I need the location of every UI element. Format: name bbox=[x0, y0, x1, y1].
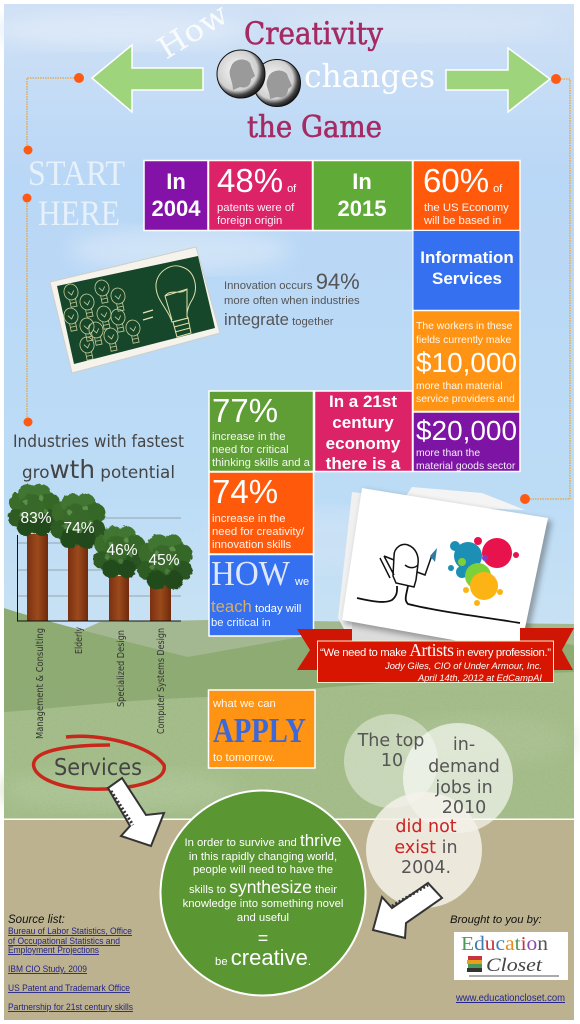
panel: 21st century economy: In a 21st bbox=[329, 392, 397, 411]
chart: tree bars: Specialized Design bbox=[116, 630, 127, 707]
source list: of Occupational Statistics and bbox=[8, 936, 120, 946]
arrow: right bbox=[446, 48, 550, 112]
panel: information services bbox=[413, 230, 520, 310]
logo: education closet bbox=[454, 932, 568, 980]
panel: 48 percent bbox=[208, 160, 312, 230]
panel: 74 percent: 74% bbox=[212, 473, 278, 510]
panel: 77 percent: increase in the bbox=[212, 431, 285, 443]
title: the Game bbox=[247, 110, 382, 145]
logo: education closet: Closet bbox=[486, 955, 543, 976]
panel: creative circle: skills to synthesize their bbox=[189, 877, 337, 897]
panel: 10000 dollars: service providers and bbox=[416, 394, 515, 405]
panel: creative circle: In order to survive and thrive bbox=[184, 831, 342, 850]
source list: US Patent and Trademark Office bbox=[8, 983, 130, 993]
chart: tree bars: Computer Systems Design bbox=[156, 628, 167, 734]
text: innovation statistic bbox=[224, 269, 360, 329]
arrow: bubbles to circle bbox=[373, 883, 442, 938]
chart: tree bars: 83% bbox=[20, 510, 52, 527]
panel: how we teach: we bbox=[294, 576, 309, 588]
panel: 74 percent: increase in the bbox=[212, 513, 285, 525]
panel: in 2004: In bbox=[166, 169, 186, 194]
bubbles: top 10 jobs: exist in bbox=[394, 838, 458, 858]
panel: how we teach: be critical in bbox=[211, 617, 271, 629]
panel: 77 percent: thinking skills and a bbox=[212, 457, 311, 469]
panel: creative circle: be creative. bbox=[215, 945, 311, 970]
heading: fastest growth: Industries with fastest bbox=[13, 432, 184, 452]
heading: start here: START bbox=[28, 153, 125, 193]
heading: start here: HERE bbox=[38, 193, 120, 233]
source list: Source list: bbox=[8, 914, 65, 926]
banner: artists quote bbox=[297, 628, 574, 683]
bubbles: top 10 jobs: did not bbox=[395, 817, 457, 837]
callout: services circled bbox=[34, 736, 164, 789]
panel: 20000 dollars: $20,000 bbox=[416, 415, 517, 446]
bubbles: top 10 jobs bbox=[344, 714, 513, 908]
panel: how we teach: teach today will bbox=[211, 597, 301, 616]
panel: 20000 dollars: more than the bbox=[416, 448, 480, 459]
dotted connector left top bbox=[22, 73, 84, 426]
link: website: www.educationcloset.com bbox=[455, 993, 565, 1004]
panel: in 2015: 2015 bbox=[338, 196, 386, 221]
panel: creative circle: people will need to have the bbox=[193, 864, 333, 876]
text: innovation statistic: Innovation occurs 94% bbox=[224, 269, 360, 294]
bubbles: top 10 jobs: 10 bbox=[381, 751, 403, 771]
chart: tree bars: 45% bbox=[148, 552, 180, 569]
panel: information services: Information bbox=[420, 248, 514, 267]
panel: 77 percent bbox=[209, 391, 314, 472]
bubbles: top 10 jobs: jobs in bbox=[434, 778, 493, 798]
panel: 21st century economy: there is a bbox=[326, 454, 401, 473]
background: sky bbox=[0, 4, 574, 704]
text: innovation statistic: integrate together bbox=[224, 310, 334, 329]
banner: artists quote: “We need to make Artists in every profession.” bbox=[320, 640, 551, 660]
chart: tree bars: 74% bbox=[63, 520, 95, 537]
panel: in 2004: 2004 bbox=[152, 196, 201, 221]
title: Creativity bbox=[244, 16, 383, 52]
source list: IBM CIO Study, 2009 bbox=[8, 964, 87, 974]
panel: 21st century economy: economy bbox=[326, 434, 401, 453]
panel: 10000 dollars: fields currently make bbox=[416, 335, 512, 346]
text: innovation statistic: more often when industries bbox=[224, 295, 360, 307]
panel: 74 percent: need for creativity/ bbox=[212, 526, 305, 538]
bubbles: top 10 jobs: 2004. bbox=[401, 858, 451, 878]
panel: apply bbox=[208, 690, 315, 768]
title: How bbox=[152, 0, 235, 67]
panel: how we teach bbox=[209, 554, 314, 636]
panel: creative circle: in this rapidly changing world, bbox=[189, 851, 337, 863]
panel: 21st century economy: century bbox=[332, 413, 394, 432]
panel: in 2015: In bbox=[352, 169, 372, 194]
panel: creative circle: = bbox=[258, 928, 268, 948]
source list: Bureau of Labor Statistics, Office bbox=[8, 926, 132, 936]
panel: 48 percent: patents were of bbox=[217, 202, 295, 214]
chart: tree bars: Management & Consulting bbox=[35, 628, 46, 739]
panel: 20000 dollars: material goods sector bbox=[416, 461, 516, 472]
source list: Employment Projections bbox=[8, 945, 99, 955]
source list bbox=[8, 914, 133, 1012]
panel: 60 percent bbox=[413, 160, 520, 230]
panel: 74 percent: innovation skills bbox=[212, 539, 291, 551]
panel: creative circle: and useful bbox=[237, 912, 289, 924]
dotted connector right bbox=[520, 74, 570, 504]
panel: 60 percent: 60% of bbox=[423, 162, 503, 199]
heading: fastest growth bbox=[13, 432, 184, 484]
panel: 48 percent: foreign origin bbox=[217, 215, 282, 227]
title: changes bbox=[304, 57, 435, 95]
bubbles: top 10 jobs: 2010 bbox=[442, 798, 486, 818]
image: artist drawing cards bbox=[338, 487, 552, 668]
panel: information services: Services bbox=[432, 269, 502, 288]
source list: Partnership for 21st century skills bbox=[8, 1002, 133, 1012]
panel: 48 percent: 48% of bbox=[217, 162, 297, 199]
icon: quarter coins bbox=[217, 50, 300, 106]
heading: start here bbox=[28, 153, 125, 233]
panel: apply: what we can bbox=[212, 698, 276, 710]
background: green hills bbox=[0, 608, 574, 820]
background: tan ground bbox=[4, 818, 574, 1020]
panel: 10000 dollars: $10,000 bbox=[416, 347, 517, 378]
logo: education closet: Education bbox=[461, 933, 548, 955]
bubbles: top 10 jobs: demand bbox=[428, 757, 500, 777]
chart: tree bars: Elderly bbox=[74, 627, 85, 654]
chart: tree bars bbox=[8, 484, 193, 739]
panel: in 2004 bbox=[144, 160, 208, 230]
panel: 10000 dollars: more than material bbox=[416, 381, 503, 392]
panel: apply: APPLY bbox=[213, 711, 306, 750]
panel: 77 percent: need for critical bbox=[212, 444, 289, 456]
heading: fastest growth: growth potential bbox=[22, 455, 175, 484]
panel: 10000 dollars bbox=[413, 310, 520, 412]
panel: 10000 dollars: The workers in these bbox=[416, 321, 513, 332]
panel: 60 percent: will be based in bbox=[423, 215, 501, 227]
bubbles: top 10 jobs: The top bbox=[357, 731, 424, 751]
panel: creative circle: knowledge into something novel bbox=[183, 898, 343, 910]
panel: how we teach: HOW bbox=[211, 554, 290, 593]
bubbles: top 10 jobs: in- bbox=[453, 735, 475, 755]
image: chalkboard with bulbs bbox=[50, 247, 220, 373]
panel: creative circle bbox=[160, 790, 366, 996]
panel: 74 percent bbox=[209, 472, 314, 554]
panel: 20000 dollars bbox=[413, 412, 520, 472]
panel: 77 percent: 77% bbox=[212, 392, 278, 429]
arrow: left bbox=[92, 45, 203, 112]
panel: 60 percent: the US Economy bbox=[424, 202, 509, 214]
panel: apply: to tomorrow. bbox=[213, 752, 275, 764]
chart: tree bars: 46% bbox=[106, 542, 138, 559]
title bbox=[152, 0, 435, 145]
panel: in 2015 bbox=[313, 160, 412, 230]
arrow: services to circle bbox=[108, 778, 164, 846]
callout: services circled: Services bbox=[54, 755, 142, 781]
banner: artists quote: Jody Giles, CIO of Under Armour, Inc. bbox=[384, 660, 542, 671]
credit: brought to you by: Brought to you by: bbox=[450, 914, 542, 926]
panel: 21st century economy bbox=[314, 391, 412, 473]
banner: artists quote: April 14th, 2012 at EdCampAI bbox=[417, 672, 542, 683]
